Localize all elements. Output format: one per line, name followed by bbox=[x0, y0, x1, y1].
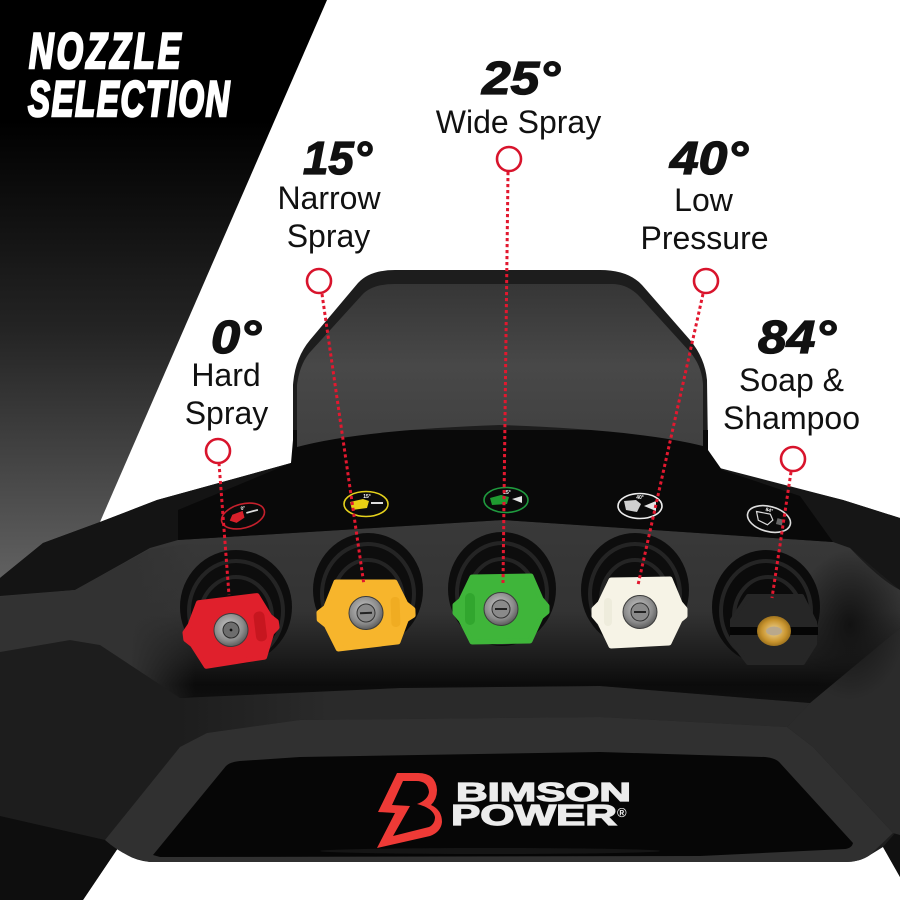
label: 0 degrees: Spray bbox=[185, 395, 268, 431]
callout lines bbox=[206, 147, 805, 598]
socket 25 bbox=[448, 532, 556, 646]
logo wordmark: BIMSON bbox=[456, 777, 631, 807]
icon: yellow 15 degree: 15° bbox=[363, 494, 371, 500]
callout 84 degrees bbox=[772, 447, 805, 598]
label: 0 degrees bbox=[185, 311, 268, 431]
pressure washer body bbox=[0, 270, 900, 900]
icon: white 40 degree bbox=[618, 494, 662, 518]
panel reflection bbox=[320, 848, 660, 854]
label: 15 degrees: Spray bbox=[287, 218, 370, 254]
socket 84 bbox=[712, 550, 820, 664]
socket 40 bbox=[581, 533, 689, 647]
label: 25 degrees: 25° bbox=[481, 52, 561, 104]
logo frame bbox=[105, 717, 893, 862]
icon: black 84 degree: 84° bbox=[765, 507, 774, 515]
glossy logo panel bbox=[153, 752, 853, 857]
right pocket shade bbox=[795, 550, 900, 700]
title bbox=[28, 24, 231, 127]
left face band bbox=[0, 543, 195, 698]
icon: yellow 15 degree bbox=[344, 492, 388, 516]
label: 0 degrees: 0° bbox=[211, 311, 262, 363]
socket 0 bbox=[180, 550, 292, 664]
lower right wedge bbox=[883, 832, 900, 877]
nozzle: white bbox=[594, 579, 685, 646]
icon: white 40 degree: 40° bbox=[636, 495, 644, 501]
lower left leg bbox=[0, 816, 118, 900]
logo mark bbox=[377, 773, 442, 848]
nozzle sockets bbox=[180, 532, 820, 664]
title: SELECTION bbox=[28, 71, 231, 127]
label: 40 degrees: Pressure bbox=[640, 220, 769, 256]
icon: green 25 degree: 25° bbox=[503, 490, 511, 496]
curved band above logo bbox=[180, 686, 810, 747]
logo wordmark: ® bbox=[617, 805, 627, 820]
logo wordmark bbox=[451, 777, 631, 832]
label: 84 degrees: 84° bbox=[758, 311, 837, 363]
shoulder top dark bbox=[0, 463, 291, 597]
label: 0 degrees: Hard bbox=[191, 357, 261, 393]
label: 15 degrees: Narrow bbox=[277, 180, 381, 216]
body silhouette bbox=[0, 270, 900, 900]
label: 40 degrees: 40° bbox=[669, 132, 749, 184]
callout 25 degrees bbox=[497, 147, 521, 583]
label: 25 degrees: Wide Spray bbox=[436, 104, 601, 140]
right lower body bbox=[787, 628, 900, 835]
gradient diagonal background panel bbox=[0, 0, 327, 600]
label: 84 degrees bbox=[723, 311, 860, 436]
nozzle: green bbox=[455, 576, 547, 642]
nozzle: yellow bbox=[318, 579, 414, 650]
title: NOZZLE bbox=[29, 24, 184, 80]
nozzle face bbox=[0, 520, 900, 703]
label: 84 degrees: Soap & bbox=[739, 362, 844, 398]
icon: red 0 degree bbox=[219, 499, 267, 533]
socket 15 bbox=[313, 533, 423, 647]
nozzle: black soap bbox=[730, 596, 818, 663]
label: 40 degrees bbox=[640, 132, 769, 256]
callout 15 degrees bbox=[307, 269, 364, 585]
label: 15 degrees bbox=[277, 132, 381, 254]
icon: red 0 degree: 0° bbox=[240, 505, 246, 512]
nozzles bbox=[182, 576, 818, 668]
callout 0 degrees bbox=[206, 439, 230, 595]
logo bbox=[377, 773, 631, 848]
icon: black 84 degree bbox=[745, 501, 793, 537]
callout 40 degrees bbox=[638, 269, 718, 585]
logo wordmark: POWER bbox=[451, 800, 617, 832]
nozzle: red bbox=[182, 594, 281, 668]
label: 40 degrees: Low bbox=[674, 182, 734, 218]
label: 84 degrees: Shampoo bbox=[723, 400, 860, 436]
tab grey panel bbox=[297, 284, 703, 447]
label: 25 degrees bbox=[436, 52, 601, 140]
label: 15 degrees: 15° bbox=[303, 132, 373, 184]
icon: green 25 degree bbox=[484, 488, 528, 512]
tab black lower section bbox=[178, 430, 833, 542]
strip icons bbox=[219, 488, 793, 537]
